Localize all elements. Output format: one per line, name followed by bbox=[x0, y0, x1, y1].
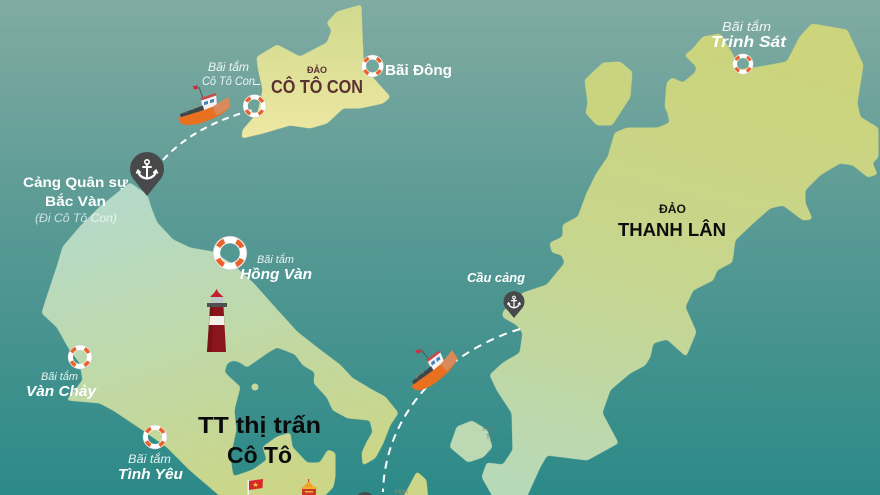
label: Bãi tắm Cô Tô Con: Cô Tô Con bbox=[202, 74, 255, 88]
ring: Vàn Chảy bbox=[67, 344, 93, 370]
island: north-west islet bbox=[585, 62, 632, 125]
label: Bãi tắm Tình Yêu: Tình Yêu bbox=[118, 466, 183, 483]
label: Đảo Cô Tô Con: ĐẢO bbox=[307, 64, 327, 76]
label: Bãi tắm Trinh Sát: Trinh Sát bbox=[711, 34, 787, 51]
ring: Hồng Vàn bbox=[212, 235, 248, 271]
label: Đảo Thanh Lân: THANH LÂN bbox=[618, 219, 726, 240]
label: Cảng Quân sự Bắc Vàn: Bắc Vàn bbox=[45, 192, 106, 209]
label: Bãi tắm Trinh Sát: Bãi tắm bbox=[722, 19, 771, 34]
label: TT thị trấn Cô Tô: Cô Tô bbox=[227, 442, 292, 468]
island: Hòn islet bbox=[402, 472, 428, 495]
label: Bãi tắm Hồng Vàn: Hồng Vàn bbox=[240, 266, 312, 283]
label: Cầu cảng: Cầu cảng bbox=[467, 270, 525, 285]
ring: Bãi tắm Cô Tô Con bbox=[242, 94, 267, 118]
island: small southern islet bbox=[450, 421, 492, 462]
label: Đảo Cô Tô Con: CÔ TÔ CON bbox=[271, 76, 363, 97]
label: TT thị trấn Cô Tô: TT thị trấn bbox=[198, 412, 321, 438]
label: Hòn Ty (small islet): Hòn bbox=[483, 426, 495, 433]
ring: Trinh Sát bbox=[732, 53, 754, 75]
boat to Cô Tô Con bbox=[178, 86, 230, 125]
label: Bãi Đông: Bãi Đông bbox=[385, 62, 452, 79]
label: Hòn Ty (small islet) bbox=[483, 426, 495, 441]
label: Bãi tắm Vàn Chảy: Bãi tắm bbox=[41, 370, 78, 383]
label: Bãi tắm Hồng Vàn: Bãi tắm bbox=[257, 253, 294, 266]
island: Thanh Lân bbox=[482, 24, 878, 495]
label: Bãi tắm Vàn Chảy bbox=[26, 370, 97, 400]
island: Cô Tô Con bbox=[242, 5, 390, 138]
label: Cảng Quân sự Bắc Vàn: (Đi Cô Tô Con) bbox=[35, 211, 117, 225]
label: Bãi tắm Vàn Chảy: Vàn Chảy bbox=[26, 383, 97, 400]
island: Cô Tô main bbox=[42, 183, 398, 495]
ring: Bãi Đông bbox=[361, 54, 384, 78]
label: Cảng Quân sự Bắc Vàn bbox=[23, 174, 129, 225]
boat to Thanh Lân bbox=[401, 338, 463, 393]
label: Bãi tắm Trinh Sát bbox=[711, 19, 787, 51]
label: Cảng Quân sự Bắc Vàn: Cảng Quân sự bbox=[23, 174, 129, 190]
route: Cầu cảng to Cô Tô bbox=[383, 329, 520, 492]
label: Bãi tắm Cô Tô Con: Bãi tắm bbox=[208, 59, 249, 74]
icon: pagoda gate bbox=[301, 479, 317, 495]
label: Hòn Ty (small islet): Ty bbox=[486, 434, 494, 441]
pin: cropped south bbox=[355, 492, 375, 495]
pin: Cầu cảng bbox=[504, 291, 524, 318]
islet in the bay bbox=[252, 384, 258, 390]
ring: Tình Yêu bbox=[142, 424, 168, 450]
label: Đảo Thanh Lân bbox=[618, 201, 726, 240]
label: Bãi tắm Tình Yêu bbox=[118, 451, 183, 483]
label: Bãi tắm Hồng Vàn bbox=[240, 253, 312, 283]
label: Đảo Thanh Lân: ĐẢO bbox=[659, 201, 686, 216]
label: Đảo Cô Tô Con bbox=[271, 64, 363, 97]
label: Bãi tắm Cô Tô Con bbox=[202, 59, 260, 88]
pin: Cảng Quân sự Bắc Vàn bbox=[130, 152, 164, 196]
icon: lighthouse bbox=[207, 289, 227, 352]
icon: Vietnamese flag bbox=[248, 479, 263, 495]
label: TT thị trấn Cô Tô bbox=[198, 412, 321, 468]
route: Bắc Vàn to Cô Tô Con bbox=[163, 110, 253, 160]
label: Bãi tắm Tình Yêu: Bãi tắm bbox=[128, 451, 171, 466]
